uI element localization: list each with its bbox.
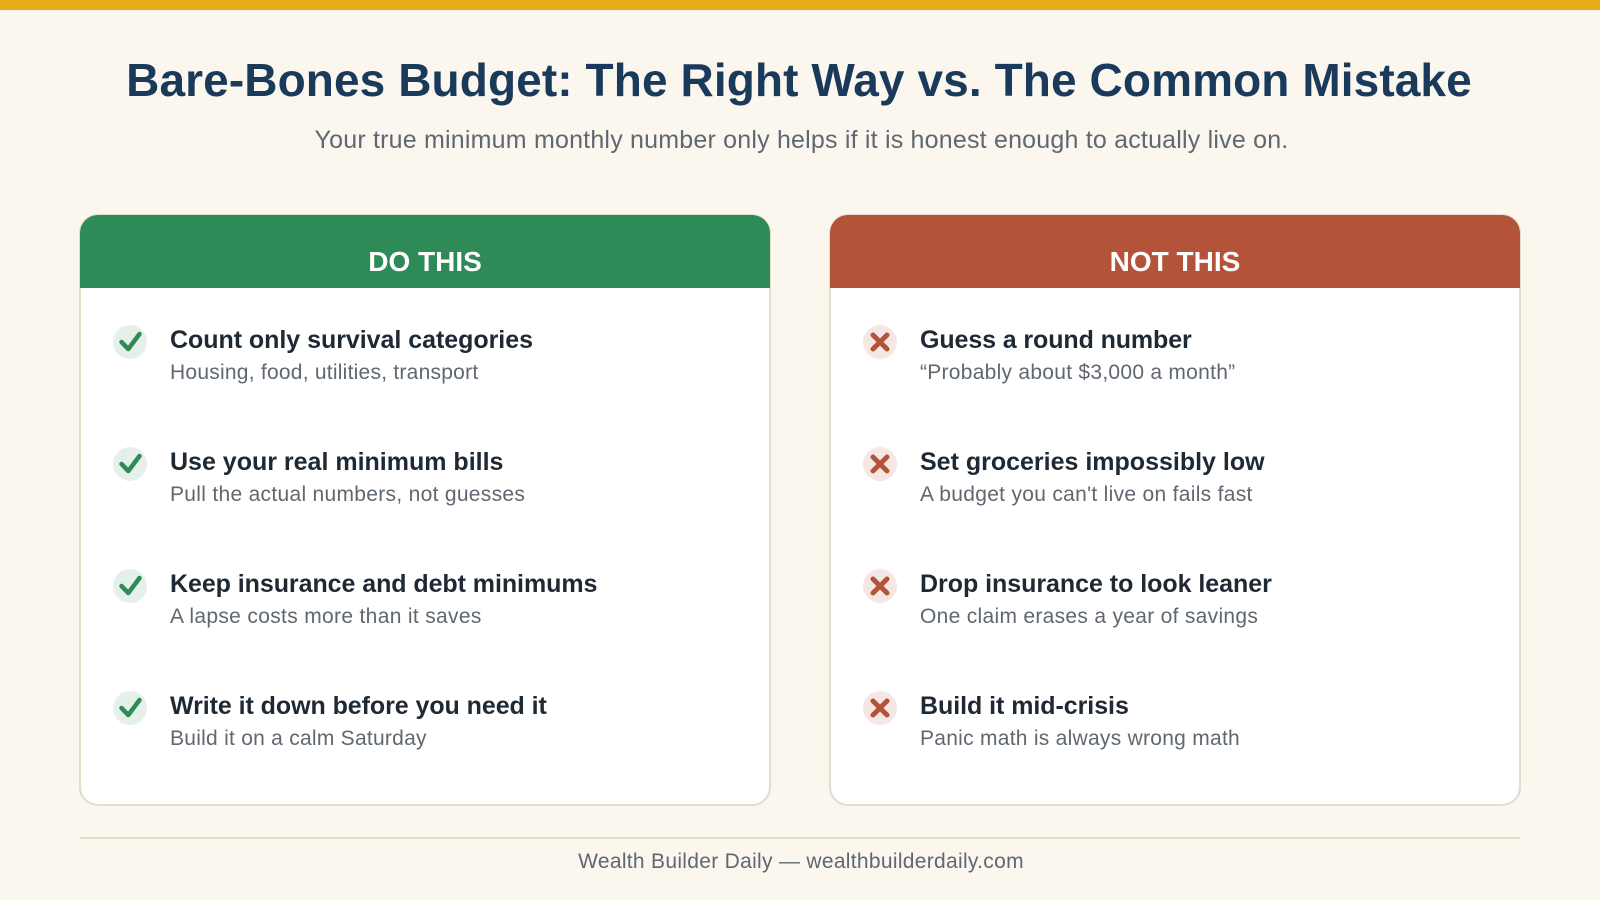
item: count only survival categories xyxy=(170,326,533,384)
item: build it mid-crisis: Build it mid-crisis xyxy=(920,692,1129,720)
item: drop insurance to look leaner xyxy=(920,570,1272,628)
header: do this: DO THIS xyxy=(368,246,482,277)
item: set groceries impossibly low: Set groceries impossibly low xyxy=(920,448,1265,476)
item: guess a round number xyxy=(920,326,1235,384)
footer: Wealth Builder Daily — wealthbuilderdaily.com xyxy=(578,850,1024,873)
item: write it down before you need it xyxy=(170,692,547,750)
header: not this: NOT THIS xyxy=(1110,246,1240,277)
title: Bare-Bones Budget: The Right Way vs. The Common Mistake xyxy=(126,54,1472,106)
item: use your real minimum bills: Pull the actual numbers, not guesses xyxy=(170,483,525,506)
item: count only survival categories: Count only survival categories xyxy=(170,326,533,354)
item: write it down before you need it: Build it on a calm Saturday xyxy=(170,727,427,750)
item: keep insurance and debt minimums xyxy=(170,570,597,628)
item: build it mid-crisis xyxy=(920,692,1240,750)
item: keep insurance and debt minimums: A lapse costs more than it saves xyxy=(170,605,482,628)
item: use your real minimum bills xyxy=(170,448,525,506)
item: set groceries impossibly low xyxy=(920,448,1265,506)
item: count only survival categories: Housing, food, utilities, transport xyxy=(170,361,478,384)
subtitle: Your true minimum monthly number only helps if it is honest enough to actually live on. xyxy=(315,126,1288,154)
item: guess a round number: Guess a round number xyxy=(920,326,1192,354)
item: drop insurance to look leaner: Drop insurance to look leaner xyxy=(920,570,1272,598)
item: use your real minimum bills: Use your real minimum bills xyxy=(170,448,503,476)
item: drop insurance to look leaner: One claim erases a year of savings xyxy=(920,605,1258,628)
item: guess a round number: “Probably about $3,000 a month” xyxy=(920,361,1235,384)
item: write it down before you need it: Write it down before you need it xyxy=(170,692,547,720)
item: keep insurance and debt minimums: Keep insurance and debt minimums xyxy=(170,570,597,598)
item: set groceries impossibly low: A budget you can't live on fails fast xyxy=(920,483,1253,506)
item: build it mid-crisis: Panic math is always wrong math xyxy=(920,727,1240,750)
